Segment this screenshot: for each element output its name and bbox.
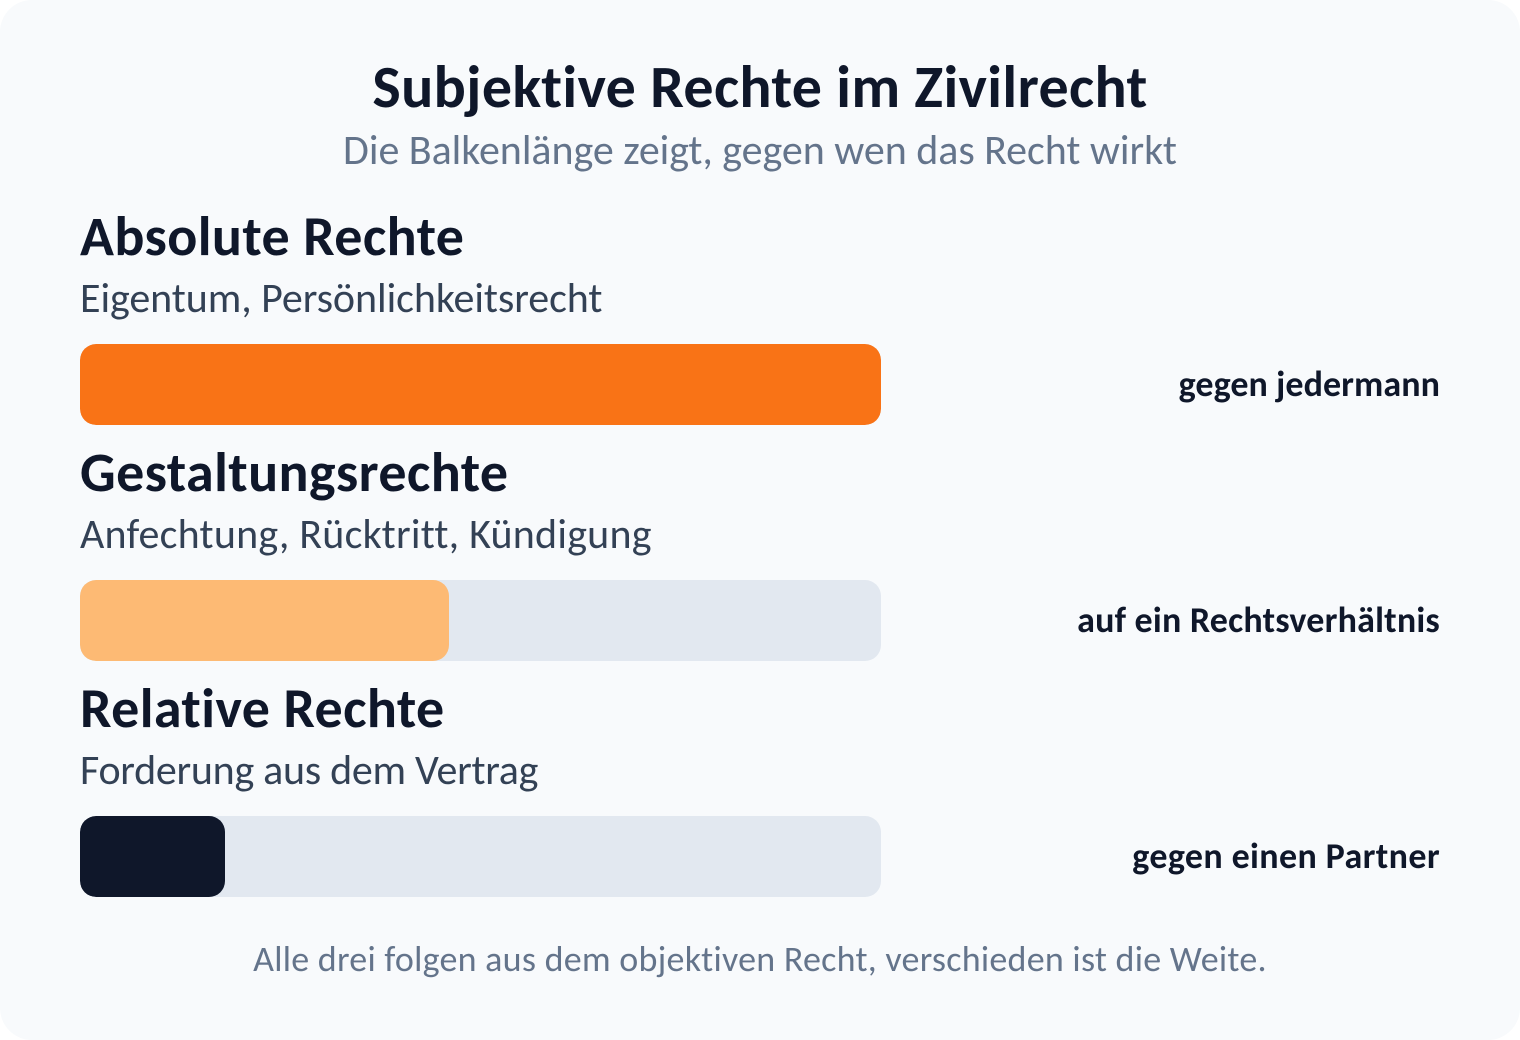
bar: Gestaltungsrechte bbox=[80, 580, 881, 661]
subtitle: Die Balkenlänge zeigt, gegen wen das Recht wirkt bbox=[343, 125, 1177, 176]
bar: Relative Rechte bbox=[80, 816, 881, 897]
bar label: auf ein Rechtsverhältnis: auf ein Rechtsverhältnis bbox=[1077, 598, 1440, 642]
examples: Absolute Rechte: Eigentum, Persönlichkeitsrecht bbox=[80, 273, 602, 324]
heading: Relative Rechte: Relative Rechte bbox=[80, 675, 445, 743]
bar label: gegen einen Partner: gegen einen Partner bbox=[1132, 834, 1440, 878]
bar label: gegen jedermann: gegen jedermann bbox=[1179, 362, 1440, 406]
heading: Gestaltungsrechte: Gestaltungsrechte bbox=[80, 439, 508, 507]
bar: Absolute Rechte bbox=[80, 344, 881, 425]
examples: Relative Rechte: Forderung aus dem Vertrag bbox=[80, 745, 538, 796]
footer note: Alle drei folgen aus dem objektiven Recht, verschieden ist die Weite. bbox=[253, 937, 1267, 981]
title: Subjektive Rechte im Zivilrecht bbox=[372, 51, 1148, 124]
examples: Gestaltungsrechte: Anfechtung, Rücktritt, Kündigung bbox=[80, 509, 652, 560]
heading: Absolute Rechte: Absolute Rechte bbox=[80, 203, 464, 271]
